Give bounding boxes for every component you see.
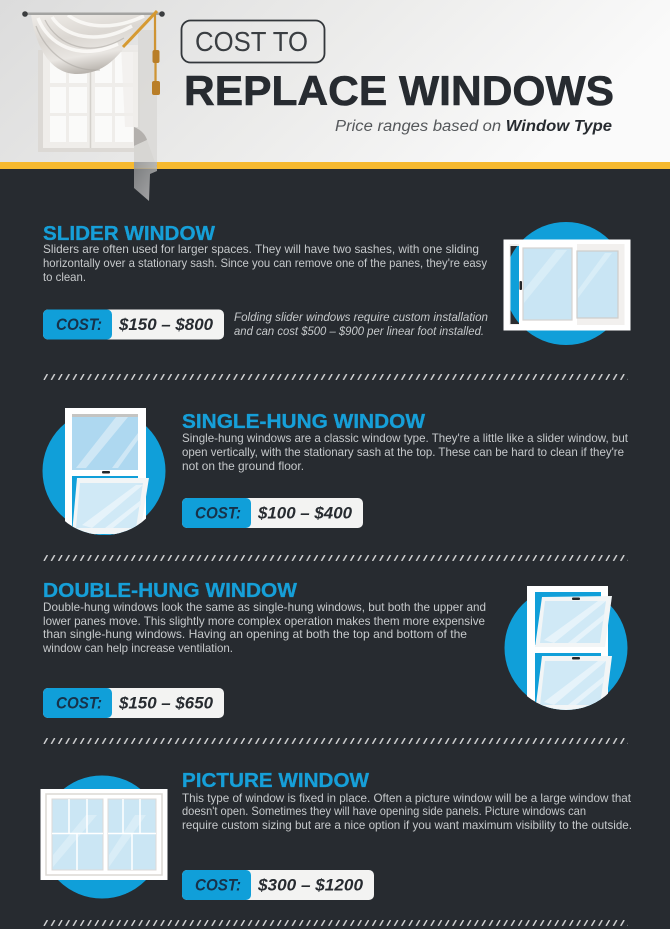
heading: slider window: SLIDER WINDOW bbox=[43, 223, 215, 245]
heading: double-hung window: DOUBLE-HUNG WINDOW bbox=[43, 580, 297, 602]
cost pill: picture bbox=[182, 870, 374, 900]
note: folding slider cost: Folding slider windows require custom installation bbox=[234, 311, 488, 324]
heading: cost to bbox=[182, 20, 324, 62]
cost pill: picture: $300 – $1200 bbox=[257, 876, 364, 894]
note: folding slider cost: and can cost $500 – $900 per linear foot installed. bbox=[234, 325, 484, 338]
heading: single-hung window: SINGLE-HUNG WINDOW bbox=[182, 411, 425, 433]
cost pill: double-hung bbox=[43, 688, 224, 718]
description: picture window: This type of window is fixed in place. Often a picture window will be a large window that bbox=[182, 791, 632, 805]
section: single-hung window bbox=[42, 408, 629, 538]
description: picture window: doesn't open. Sometimes they will have opening side panels. Picture windows can bbox=[182, 804, 586, 818]
subtitle: Price ranges based on Window Type bbox=[335, 118, 612, 135]
heading: picture window: PICTURE WINDOW bbox=[182, 770, 369, 792]
cost pill: single-hung: COST: bbox=[195, 504, 241, 522]
description: single-hung window: open vertically, with the stationary sash at the top. These can be hard to clean if they're bbox=[182, 445, 624, 459]
description: picture window: require custom sizing but are a nice option if you want maximum visibility to the outside. bbox=[182, 818, 632, 832]
description: double-hung window: Double-hung windows look the same as single-hung windows, but both the upper and bbox=[43, 600, 486, 614]
note: folding slider cost bbox=[234, 311, 488, 338]
description: slider window bbox=[43, 242, 487, 284]
description: double-hung window bbox=[42, 600, 486, 655]
cost pill: slider bbox=[43, 310, 224, 340]
illustration: curtained window bbox=[22, 11, 165, 201]
cost pill: single-hung: $100 – $400 bbox=[257, 504, 353, 522]
divider bbox=[43, 738, 628, 744]
section: slider window bbox=[43, 222, 630, 345]
description: slider window: to clean. bbox=[43, 270, 86, 284]
icon: slider window bbox=[504, 222, 630, 345]
description: single-hung window: not on the ground floor. bbox=[182, 459, 304, 473]
title: REPLACE WINDOWS bbox=[184, 67, 614, 114]
divider bbox=[43, 920, 628, 926]
cost pill: double-hung: $150 – $650 bbox=[118, 694, 214, 712]
icon: picture window bbox=[40, 776, 168, 898]
description: slider window: Sliders are often used for larger spaces. They will have two sashes, with one sliding bbox=[43, 242, 479, 256]
description: picture window bbox=[182, 791, 632, 832]
description: slider window: horizontally over a stationary sash. Since you can remove one of the panes, they're easy bbox=[43, 256, 487, 270]
description: single-hung window: Single-hung windows are a classic window type. They're a little like a slider window, but bbox=[182, 431, 629, 445]
cost pill: slider: $150 – $800 bbox=[118, 315, 214, 334]
section: picture window bbox=[40, 770, 632, 900]
description: double-hung window: than single-hung windows. Having an opening at both the top and bottom of the bbox=[43, 627, 467, 641]
icon: double-hung window bbox=[504, 586, 628, 716]
cost pill: single-hung bbox=[182, 498, 363, 528]
description: double-hung window: lower panes move. This slightly more complex operation makes them more expensive bbox=[43, 614, 485, 628]
header panel bbox=[0, 0, 670, 169]
cost pill: picture: COST: bbox=[195, 876, 241, 894]
heading: cost to: COST TO bbox=[195, 26, 308, 57]
divider bbox=[43, 374, 628, 380]
section: double-hung window bbox=[42, 580, 627, 718]
description: single-hung window bbox=[182, 431, 629, 473]
cost pill: double-hung: COST: bbox=[56, 694, 102, 712]
description: double-hung window: window can help increase ventilation. bbox=[42, 641, 233, 655]
divider bbox=[43, 555, 628, 561]
icon: single-hung window bbox=[42, 408, 166, 538]
cost pill: slider: COST: bbox=[56, 316, 102, 334]
